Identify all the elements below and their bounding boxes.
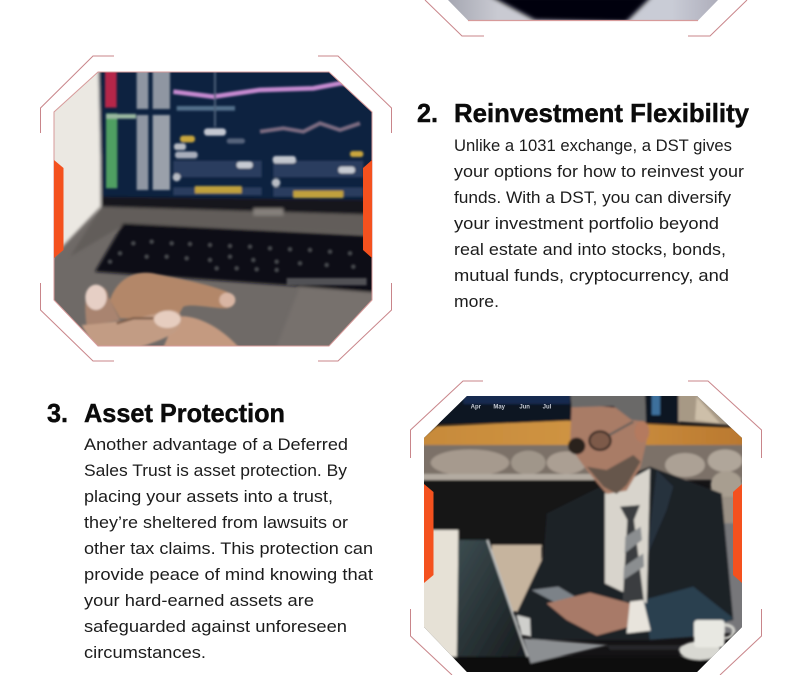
- orange tab left: [424, 484, 434, 583]
- photo: wall chart month labels: May: [493, 405, 506, 411]
- orange tab right: [733, 484, 742, 583]
- outer corner brackets: [410, 381, 762, 675]
- section 3 body text: Another advantage of a Deferred: [84, 435, 348, 454]
- section 3 body text: Sales Trust is asset protection. By: [84, 461, 348, 480]
- photo frame: businessman with phone and laptop: [410, 381, 762, 675]
- photo: man in suit at table: [417, 387, 753, 675]
- section 2 number: 2.: [417, 98, 438, 128]
- section 3 body text: they’re sheltered from lawsuits or: [84, 513, 348, 532]
- section 2 body text: mutual funds, cryptocurrency, and: [454, 266, 729, 285]
- section 2 body text: more.: [454, 292, 499, 311]
- section 2 body text: your options for how to reinvest your: [454, 162, 744, 181]
- orange tab right: [363, 160, 372, 258]
- section 2 body text: Unlike a 1031 exchange, a DST gives: [454, 136, 732, 155]
- photo frame: laptop with trading charts: [40, 56, 391, 361]
- orange tab left: [54, 160, 64, 258]
- section 2 body text: real estate and into stocks, bonds,: [454, 240, 726, 259]
- photo: wall chart month labels: Jun: [519, 405, 530, 411]
- section 3 body text: other tax claims. This protection can: [84, 539, 373, 558]
- section 2 body text: [454, 136, 744, 311]
- section 3 body text: circumstances.: [84, 643, 206, 662]
- photo: wall chart month labels: Apr: [471, 405, 482, 411]
- photo: wall chart month labels: Jul: [543, 405, 552, 411]
- section 2 heading: Reinvestment Flexibility: [454, 98, 750, 128]
- section 3 body text: provide peace of mind knowing that: [84, 565, 373, 584]
- photo frame: top cropped image: [425, 0, 747, 36]
- section 2 body text: funds. With a DST, you can diversify: [454, 188, 732, 207]
- section 3 number: 3.: [47, 398, 68, 428]
- section 3 heading: Asset Protection: [84, 398, 285, 428]
- section 3 body text: placing your assets into a trust,: [84, 487, 333, 506]
- section 2 body text: your investment portfolio beyond: [454, 214, 719, 233]
- photo: wall chart month labels: [471, 405, 552, 411]
- section 3 body text: safeguarded against unforeseen: [84, 617, 347, 636]
- section 3 body text: [84, 435, 373, 662]
- photo: hand over laptop keyboard: [54, 72, 372, 346]
- section 3 body text: your hard-earned assets are: [84, 591, 314, 610]
- outer corner brackets: [40, 56, 392, 361]
